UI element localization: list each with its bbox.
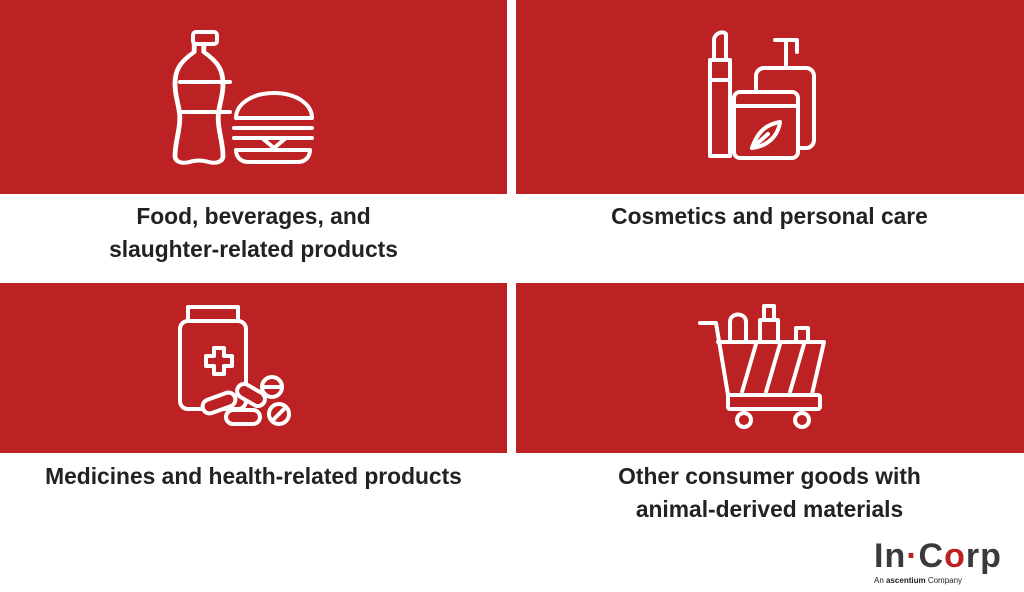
icon: cosmetics [708, 30, 816, 160]
text: medicines: Medicines and health-related products [45, 463, 462, 489]
icon: bottle and burger [172, 30, 314, 165]
panel: food [0, 0, 507, 194]
icon: cart [698, 304, 826, 429]
text: other goods [618, 463, 921, 522]
text: other goods: animal-derived materials [636, 496, 903, 522]
text: cosmetics: Cosmetics and personal care [611, 203, 928, 229]
icon: medicine [178, 305, 291, 426]
panel: cosmetics [516, 0, 1024, 194]
text: food [109, 203, 398, 262]
panel: medicines [0, 283, 507, 453]
text: other goods: Other consumer goods with [618, 463, 921, 489]
logo: In·Corp [874, 537, 1002, 575]
panel: other goods [516, 283, 1024, 453]
text: food: Food, beverages, and [136, 203, 371, 229]
logo: An ascentium Company [874, 576, 962, 585]
text: food: slaughter-related products [109, 236, 398, 262]
